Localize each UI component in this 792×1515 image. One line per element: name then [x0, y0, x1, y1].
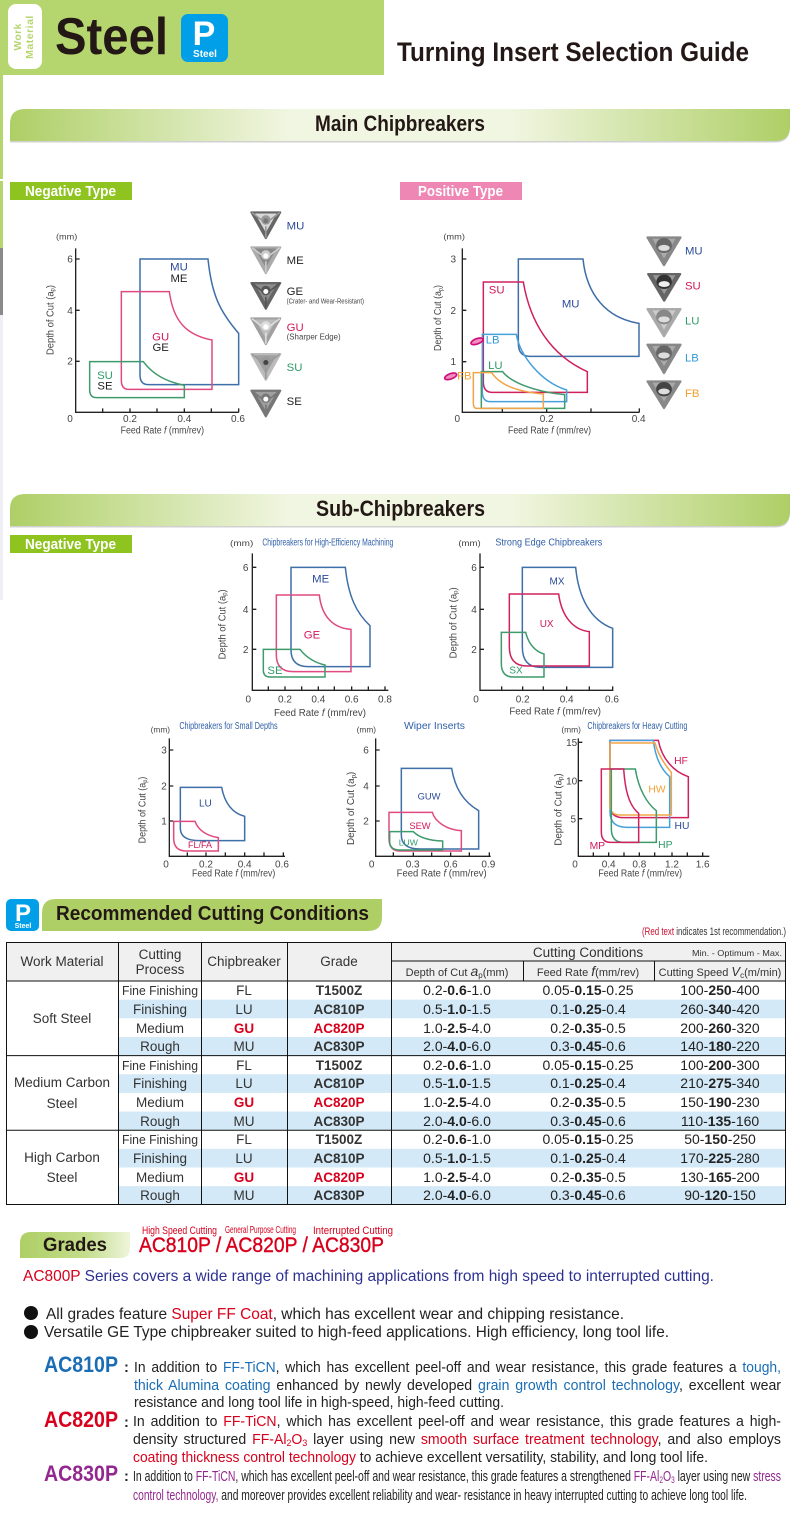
chart: heavy cutting: Feed Rate f (mm/rev) [598, 869, 682, 880]
medium carbon steel rows: Medium [136, 1095, 184, 1110]
soft steel rows: Medium [136, 1021, 184, 1036]
medium carbon steel rows: 0.3-0.45-0.6 [550, 1113, 626, 1129]
chart: high-efficiency machining: 0.8 [378, 695, 392, 706]
series description: AC800P Series covers a wide range of machining applications from high speed to interrupted cutting. [23, 1268, 714, 1285]
medium carbon steel rows: Rough [140, 1114, 180, 1129]
chart: high-efficiency machining: ) [217, 589, 228, 592]
work material column: Medium Carbon [14, 1075, 110, 1090]
chart: high-efficiency machining: ME [312, 574, 330, 586]
insert legend: main positive type: FB [685, 388, 699, 400]
table header: p [478, 971, 483, 980]
chart: main negative type: 0.2 [123, 414, 137, 425]
chart: heavy cutting: 0.8 [632, 860, 647, 871]
table header: Process [136, 962, 185, 977]
grade: AC830P: AC830P [44, 1461, 118, 1486]
table header: Cutting [139, 947, 181, 962]
heading: Grades: Grades [43, 1235, 107, 1256]
grade: AC830P: stress [753, 1469, 781, 1485]
medium carbon steel rows: AC830P [313, 1114, 365, 1129]
chart: heavy cutting: Depth of Cut (a [553, 778, 564, 846]
chart: small depths: 2 [161, 782, 167, 793]
chart: small depths: Chipbreakers for Small Depths [179, 721, 278, 732]
chart: strong edge chipbreakers: 4 [471, 605, 477, 616]
work material column: High Carbon [24, 1150, 100, 1165]
chart: high-efficiency machining: 0.2 [278, 695, 292, 706]
table header: (m/min) [744, 967, 781, 979]
chart: small depths [138, 721, 289, 880]
table header: Cutting Speed V [659, 964, 740, 979]
grade: AC820P [44, 1407, 781, 1466]
heading: Grades [20, 1232, 130, 1258]
grade: AC810P [44, 1352, 781, 1411]
chart: wiper inserts: Wiper Inserts [404, 721, 465, 732]
chart: strong edge chipbreakers: 0 [473, 695, 479, 706]
grade names and cutting uses: Interrupted Cutting [313, 1225, 393, 1237]
grade: AC830P: In addition to FF-TiCN, which has excellent peel-off and wear resistance, this grade features a strengthened FF-Al [133, 1469, 784, 1485]
chart: main negative type: SE [97, 381, 113, 393]
chart: main negative type: 0.4 [177, 414, 192, 425]
insert legend: main negative type [251, 212, 364, 417]
chart: main positive type: ) [433, 285, 444, 288]
chart: strong edge chipbreakers: 0.6 [605, 695, 619, 706]
high carbon steel rows: 0.5-1.0-1.5 [423, 1150, 491, 1166]
chart: strong edge chipbreakers: 2 [471, 645, 477, 656]
work material column: Steel [47, 1170, 77, 1185]
high carbon steel rows: GU [234, 1170, 254, 1185]
chart: main positive type: LB [486, 335, 500, 347]
chart: wiper inserts: 0.6 [444, 860, 458, 871]
chart: main negative type: 4 [67, 306, 73, 317]
grade: AC830P: O [663, 1469, 671, 1485]
high carbon steel rows: 90-120-150 [684, 1187, 756, 1203]
chart: heavy cutting: 1.6 [696, 860, 710, 871]
chart: strong edge chipbreakers: (mm) [458, 538, 481, 548]
chart: heavy cutting: Chipbreakers for Heavy Cutting [587, 721, 687, 732]
medium carbon steel rows: 0.05-0.15-0.25 [542, 1057, 634, 1073]
soft steel rows: AC830P [313, 1039, 365, 1054]
chart: high-efficiency machining: (mm) [230, 538, 253, 548]
work material column: Steel [47, 1096, 77, 1111]
chart: high-efficiency machining: 0.6 [345, 695, 359, 706]
chart: main negative type: (mm) [56, 232, 77, 242]
medium carbon steel rows [122, 1057, 760, 1129]
grade: AC830P: 2 [659, 1475, 663, 1485]
chart: small depths: ) [138, 777, 149, 780]
soft steel rows: 0.1-0.25-0.4 [550, 1001, 626, 1017]
chart: small depths: 3 [161, 746, 167, 757]
chart: heavy cutting: 0.4 [602, 860, 616, 871]
section bar: Sub-Chipbreakers: Sub-Chipbreakers [316, 496, 485, 521]
chart: wiper inserts: 6 [363, 746, 369, 757]
medium carbon steel rows: 100-200-300 [680, 1057, 760, 1073]
chart: main negative type: 2 [67, 357, 73, 368]
high carbon steel rows: LU [235, 1151, 253, 1166]
high carbon steel rows: 0.3-0.45-0.6 [550, 1187, 626, 1203]
soft steel rows: 0.05-0.15-0.25 [542, 982, 634, 998]
chart: strong edge chipbreakers: 0.2 [516, 695, 530, 706]
high carbon steel rows: 50-150-250 [684, 1131, 756, 1147]
soft steel rows: 140-180-220 [680, 1038, 760, 1054]
Steel heading: Steel [55, 8, 168, 66]
chart: high-efficiency machining [217, 537, 393, 719]
high carbon steel rows: 130-165-200 [680, 1169, 760, 1185]
work material column: Soft Steel [33, 1011, 91, 1026]
P badge: P [193, 15, 215, 53]
chart: main negative type: 0.6 [231, 414, 245, 425]
label: Negative Type (sub): Negative Type [25, 536, 116, 553]
chart: main positive type: SU [489, 285, 505, 297]
high carbon steel rows: Finishing [133, 1151, 187, 1166]
medium carbon steel rows: LU [235, 1076, 253, 1091]
label: Negative Type: Negative Type [25, 183, 116, 200]
medium carbon steel rows: 0.2-0.6-1.0 [423, 1057, 491, 1073]
chart: main positive type: MU [562, 299, 579, 311]
chart: heavy cutting: 10 [566, 776, 578, 787]
heading: Recommended Cutting Conditions: Recommended Cutting Conditions [56, 903, 369, 925]
chart: wiper inserts: GUW [418, 792, 441, 802]
chart: wiper inserts [346, 721, 496, 880]
high carbon steel rows: T1500Z [316, 1132, 362, 1147]
chart: high-efficiency machining: Depth of Cut (a [217, 592, 228, 659]
chart: main negative type: SU [97, 370, 113, 382]
chart: heavy cutting [553, 721, 710, 880]
high carbon steel rows: Medium [136, 1170, 184, 1185]
table header: Work Material [20, 954, 104, 969]
chart: wiper inserts: (mm) [357, 724, 376, 734]
soft steel rows [122, 982, 760, 1054]
grade: AC820P: layer using new [307, 1432, 421, 1448]
chart: wiper inserts: LUW [399, 837, 419, 847]
table header: (mm) [483, 967, 508, 979]
soft steel rows: 1.0-2.5-4.0 [423, 1020, 491, 1036]
chart: main negative type: Depth of Cut (a [45, 287, 56, 355]
grade: AC830P: 3 [671, 1475, 675, 1485]
high carbon steel rows: AC830P [313, 1188, 365, 1203]
insert legend: main negative type: SU [287, 362, 302, 374]
chart: main positive type: LU [488, 360, 503, 372]
chart: high-efficiency machining: 4 [243, 605, 249, 616]
chart: main positive type: Feed Rate f (mm/rev) [508, 426, 591, 437]
work material tag: Material [24, 15, 36, 59]
grade: AC810P: resistance and long tool life in high-speed, high-feed cutting. [134, 1395, 504, 1411]
high carbon steel rows: 0.2-0.6-1.0 [423, 1131, 491, 1147]
grade: AC820P: coating thickness control technology to achieve excellent versatility, stability, and long tool life. [133, 1450, 708, 1466]
insert legend: main positive type [647, 237, 703, 408]
chart: main positive type: FB [457, 371, 472, 383]
high carbon steel rows: AC810P [313, 1151, 365, 1166]
chart: main positive type: 0.4 [632, 414, 646, 425]
chart: main positive type: 0.2 [540, 414, 554, 425]
soft steel rows: 0.2-0.35-0.5 [550, 1020, 626, 1036]
medium carbon steel rows: Finishing [133, 1076, 187, 1091]
soft steel rows: 260-340-420 [680, 1001, 760, 1017]
soft steel rows: 0.5-1.0-1.5 [423, 1001, 491, 1017]
soft steel rows: 0.3-0.45-0.6 [550, 1038, 626, 1054]
soft steel rows: Finishing [133, 1002, 187, 1017]
chart: main negative type: Feed Rate f (mm/rev) [121, 426, 204, 437]
table header: Chipbreaker [207, 954, 281, 969]
chart: main positive type: 1 [451, 357, 457, 368]
chart: main positive type: 3 [451, 255, 457, 266]
chart: heavy cutting: HW [648, 785, 666, 796]
chart: strong edge chipbreakers: Strong Edge Chipbreakers [495, 537, 602, 548]
chart: high-efficiency machining: Feed Rate f (mm/rev) [274, 708, 366, 719]
chart: main negative type: p [50, 288, 57, 291]
soft steel rows: MU [234, 1039, 254, 1054]
chart: wiper inserts: Feed Rate f (mm/rev) [397, 869, 487, 880]
soft steel rows: LU [235, 1002, 253, 1017]
table header [20, 945, 782, 980]
medium carbon steel rows: 210-275-340 [680, 1075, 760, 1091]
P steel badge [6, 899, 39, 931]
chart: strong edge chipbreakers: 0.4 [560, 695, 574, 706]
insert legend: main negative type: (Crater- and Wear-Resistant) [287, 298, 364, 305]
chart: small depths: 0.4 [238, 860, 252, 871]
medium carbon steel rows: Fine Finishing [122, 1058, 198, 1073]
table header: Cutting Conditions [533, 945, 643, 960]
chart: wiper inserts: SEW [409, 821, 431, 831]
page side strip [0, 75, 3, 600]
medium carbon steel rows: 0.2-0.35-0.5 [550, 1094, 626, 1110]
chart: small depths: 0.6 [275, 860, 289, 871]
chart: strong edge chipbreakers: p [453, 590, 460, 594]
insert legend: main negative type: ME [287, 255, 304, 267]
chart: strong edge chipbreakers: UX [540, 619, 554, 630]
high carbon steel rows: Fine Finishing [122, 1132, 198, 1147]
P badge: Steel [193, 49, 217, 60]
chart: heavy cutting: ) [553, 773, 564, 777]
soft steel rows: FL [236, 983, 252, 998]
chart: main positive type: 0 [455, 414, 461, 425]
table header: Grade [320, 954, 358, 969]
chart: small depths: 1 [161, 817, 167, 828]
high carbon steel rows: 0.2-0.35-0.5 [550, 1169, 626, 1185]
soft steel rows: AC810P [313, 1002, 365, 1017]
insert legend: main negative type: SE [287, 396, 302, 408]
chart: main negative type: 6 [67, 255, 73, 266]
chart: small depths: LU [199, 799, 212, 810]
chart: high-efficiency machining: Chipbreakers for High-Efficiency Machining [262, 537, 393, 548]
chart: wiper inserts: 4 [363, 782, 369, 793]
chart: high-efficiency machining: 2 [243, 645, 249, 656]
insert legend: main negative type: GE [287, 286, 303, 298]
table backgrounds [6, 942, 786, 1205]
grade: AC830P: layer using new [675, 1469, 753, 1485]
P steel badge: Steel [15, 923, 31, 930]
chart: wiper inserts: p [350, 774, 357, 778]
chart: main positive type: 2 [451, 306, 457, 317]
table header: c [740, 971, 744, 980]
chart: wiper inserts: 0.9 [481, 860, 496, 871]
chart: heavy cutting: HU [675, 821, 689, 832]
chart: high-efficiency machining: 6 [243, 563, 249, 574]
chart: high-efficiency machining: GE [304, 630, 321, 642]
soft steel rows: 2.0-4.0-6.0 [423, 1038, 491, 1054]
chart: strong edge chipbreakers: Depth of Cut (a [448, 591, 459, 658]
guide title: Turning Insert Selection Guide [397, 37, 749, 67]
chart: main negative type: ME [170, 273, 188, 285]
chart: high-efficiency machining: p [222, 592, 229, 596]
grade: AC820P: O [291, 1432, 302, 1448]
table header: Feed Rate f(mm/rev) [537, 963, 639, 979]
grade: AC820P: In addition to FF-TiCN, which has excellent peel-off and wear resistance, this grade features a high- [133, 1414, 781, 1430]
bullet list: All grades feature Super FF Coat, which has excellent wear and chipping resistance. [46, 1306, 624, 1323]
medium carbon steel rows: 150-190-230 [680, 1094, 760, 1110]
grade: AC820P: : [124, 1415, 129, 1431]
high carbon steel rows: 2.0-4.0-6.0 [423, 1187, 491, 1203]
medium carbon steel rows: FL [236, 1058, 252, 1073]
P steel badge: P [15, 900, 31, 927]
chart: small depths: Depth of Cut (a [138, 776, 149, 843]
section bar: Main Chipbreakers: Main Chipbreakers [315, 111, 485, 136]
chart: small depths: Feed Rate f (mm/rev) [192, 869, 275, 880]
work material column [14, 1011, 110, 1185]
chart: wiper inserts: ) [346, 772, 357, 775]
high carbon steel rows: 0.05-0.15-0.25 [542, 1131, 634, 1147]
chart: main positive type: p [437, 288, 444, 291]
chart: heavy cutting: HP [658, 840, 673, 851]
insert legend: main negative type: GU [287, 322, 304, 334]
grade names and cutting uses: AC810P / AC820P / AC830P [139, 1234, 384, 1257]
chart: high-efficiency machining: SE [267, 665, 283, 677]
chart: strong edge chipbreakers: 6 [471, 563, 477, 574]
P badge [181, 14, 228, 62]
medium carbon steel rows: MU [234, 1114, 254, 1129]
label: Positive Type: Positive Type [418, 183, 503, 200]
chart: high-efficiency machining: 0 [246, 695, 252, 706]
chart: main positive type: Depth of Cut (a [433, 283, 444, 351]
chart: strong edge chipbreakers [448, 537, 619, 717]
bullet list: Versatile GE Type chipbreaker suited to high-feed applications. High efficiency, long tool life. [44, 1324, 669, 1341]
high carbon steel rows: 1.0-2.5-4.0 [423, 1169, 491, 1185]
chart: small depths: FL/FA [188, 840, 212, 850]
chart: wiper inserts: Depth of Cut (a [346, 777, 357, 845]
chart: small depths: 0.2 [199, 860, 213, 871]
section bar: Sub-Chipbreakers [10, 494, 790, 528]
chart: heavy cutting: 5 [571, 814, 577, 825]
chart: small depths: 0 [163, 860, 169, 871]
grade: AC830P: : [124, 1469, 129, 1485]
soft steel rows: Rough [140, 1039, 180, 1054]
chart: heavy cutting: 0 [572, 860, 578, 871]
grade: AC820P: density structured FF-Al [133, 1432, 288, 1448]
medium carbon steel rows: 2.0-4.0-6.0 [423, 1113, 491, 1129]
grade: AC810P: thick Alumina coating enhanced by newly developed grain growth control technology, excellent wear [134, 1378, 781, 1394]
chart: main negative type: ) [45, 285, 56, 288]
chart: wiper inserts: 2 [363, 817, 369, 828]
grade names and cutting uses: High Speed Cutting [142, 1225, 217, 1237]
chart: heavy cutting: MP [590, 841, 605, 852]
chart: heavy cutting: p [558, 776, 565, 780]
soft steel rows: Fine Finishing [122, 983, 198, 998]
chart: wiper inserts: 0.3 [406, 860, 420, 871]
soft steel rows: 0.2-0.6-1.0 [423, 982, 491, 998]
grade: AC810P: In addition to FF-TiCN, which has excellent peel-off and wear resistance, this grade features a tough, [134, 1360, 781, 1376]
insert legend: main negative type: MU [287, 221, 304, 233]
soft steel rows: AC820P [313, 1021, 365, 1036]
chart: heavy cutting: 15 [566, 738, 578, 749]
grade: AC820P: 2 [287, 1438, 291, 1448]
chart: main positive type: (mm) [443, 232, 465, 242]
chart: main negative type [45, 232, 245, 437]
chart: high-efficiency machining: 0.4 [311, 695, 326, 706]
table header: Min. - Optimum - Max. [692, 948, 782, 958]
medium carbon steel rows: GU [234, 1095, 254, 1110]
chart: heavy cutting: 1.2 [665, 860, 679, 871]
grade: AC810P: AC810P [44, 1352, 118, 1377]
chart: main negative type: MU [170, 262, 188, 274]
chart: strong edge chipbreakers: ) [448, 587, 459, 591]
chart: small depths: p [142, 779, 149, 783]
insert legend: main positive type: LU [685, 316, 699, 328]
high carbon steel rows [122, 1131, 760, 1203]
medium carbon steel rows: AC820P [313, 1095, 365, 1110]
grade: AC820P: AC820P [44, 1407, 118, 1432]
chart: main negative type: GE [152, 342, 169, 354]
insert legend: main positive type: LB [685, 353, 699, 365]
medium carbon steel rows: 0.5-1.0-1.5 [423, 1075, 491, 1091]
chart: main negative type: GU [152, 332, 169, 344]
section bar: Main Chipbreakers [10, 109, 790, 142]
chart: heavy cutting: HF [674, 756, 688, 767]
chart: strong edge chipbreakers: SX [509, 665, 523, 676]
work material tag: Work [12, 23, 24, 51]
medium carbon steel rows: 110-135-160 [681, 1113, 759, 1129]
high carbon steel rows: AC820P [313, 1170, 365, 1185]
medium carbon steel rows: 0.1-0.25-0.4 [550, 1075, 626, 1091]
work material tag [8, 4, 42, 69]
chart: main positive type [433, 232, 646, 437]
bullet list [24, 1306, 669, 1341]
high carbon steel rows: Rough [140, 1188, 180, 1203]
grade: AC810P: : [124, 1360, 129, 1376]
soft steel rows: 100-250-400 [680, 982, 760, 998]
heading: Recommended Cutting Conditions [42, 899, 382, 931]
chart: small depths: (mm) [151, 724, 170, 734]
chart: main negative type: 0 [67, 414, 73, 425]
medium carbon steel rows: 1.0-2.5-4.0 [423, 1094, 491, 1110]
high carbon steel rows: FL [236, 1132, 252, 1147]
medium carbon steel rows: AC810P [313, 1076, 365, 1091]
high carbon steel rows: 0.1-0.25-0.4 [550, 1150, 626, 1166]
medium carbon steel rows: T1500Z [316, 1058, 362, 1073]
header banner: Steel work material [0, 0, 384, 75]
grade: AC820P: smooth surface treatment technology, and also employs [421, 1432, 785, 1448]
soft steel rows: 200-260-320 [680, 1020, 760, 1036]
grade names and cutting uses: General Purpose Cutting [225, 1225, 296, 1236]
soft steel rows: GU [234, 1021, 254, 1036]
insert legend: main negative type: (Sharper Edge) [287, 332, 341, 342]
chart: heavy cutting: (mm) [561, 724, 581, 734]
high carbon steel rows: MU [234, 1188, 254, 1203]
grade names and cutting uses [139, 1225, 393, 1257]
grade: AC830P [44, 1461, 781, 1504]
soft steel rows: T1500Z [316, 983, 362, 998]
insert legend: main positive type: MU [685, 246, 703, 258]
chart: strong edge chipbreakers: MX [550, 577, 565, 588]
chart: wiper inserts: 0 [369, 860, 375, 871]
table: recommended cutting conditions [6, 942, 786, 1205]
grade: AC820P: 3 [302, 1438, 307, 1448]
insert legend: main positive type: SU [685, 281, 701, 293]
high carbon steel rows: 170-225-280 [680, 1150, 760, 1166]
chart: strong edge chipbreakers: Feed Rate f (mm/rev) [509, 706, 601, 717]
table header: Depth of Cut a [406, 963, 478, 979]
